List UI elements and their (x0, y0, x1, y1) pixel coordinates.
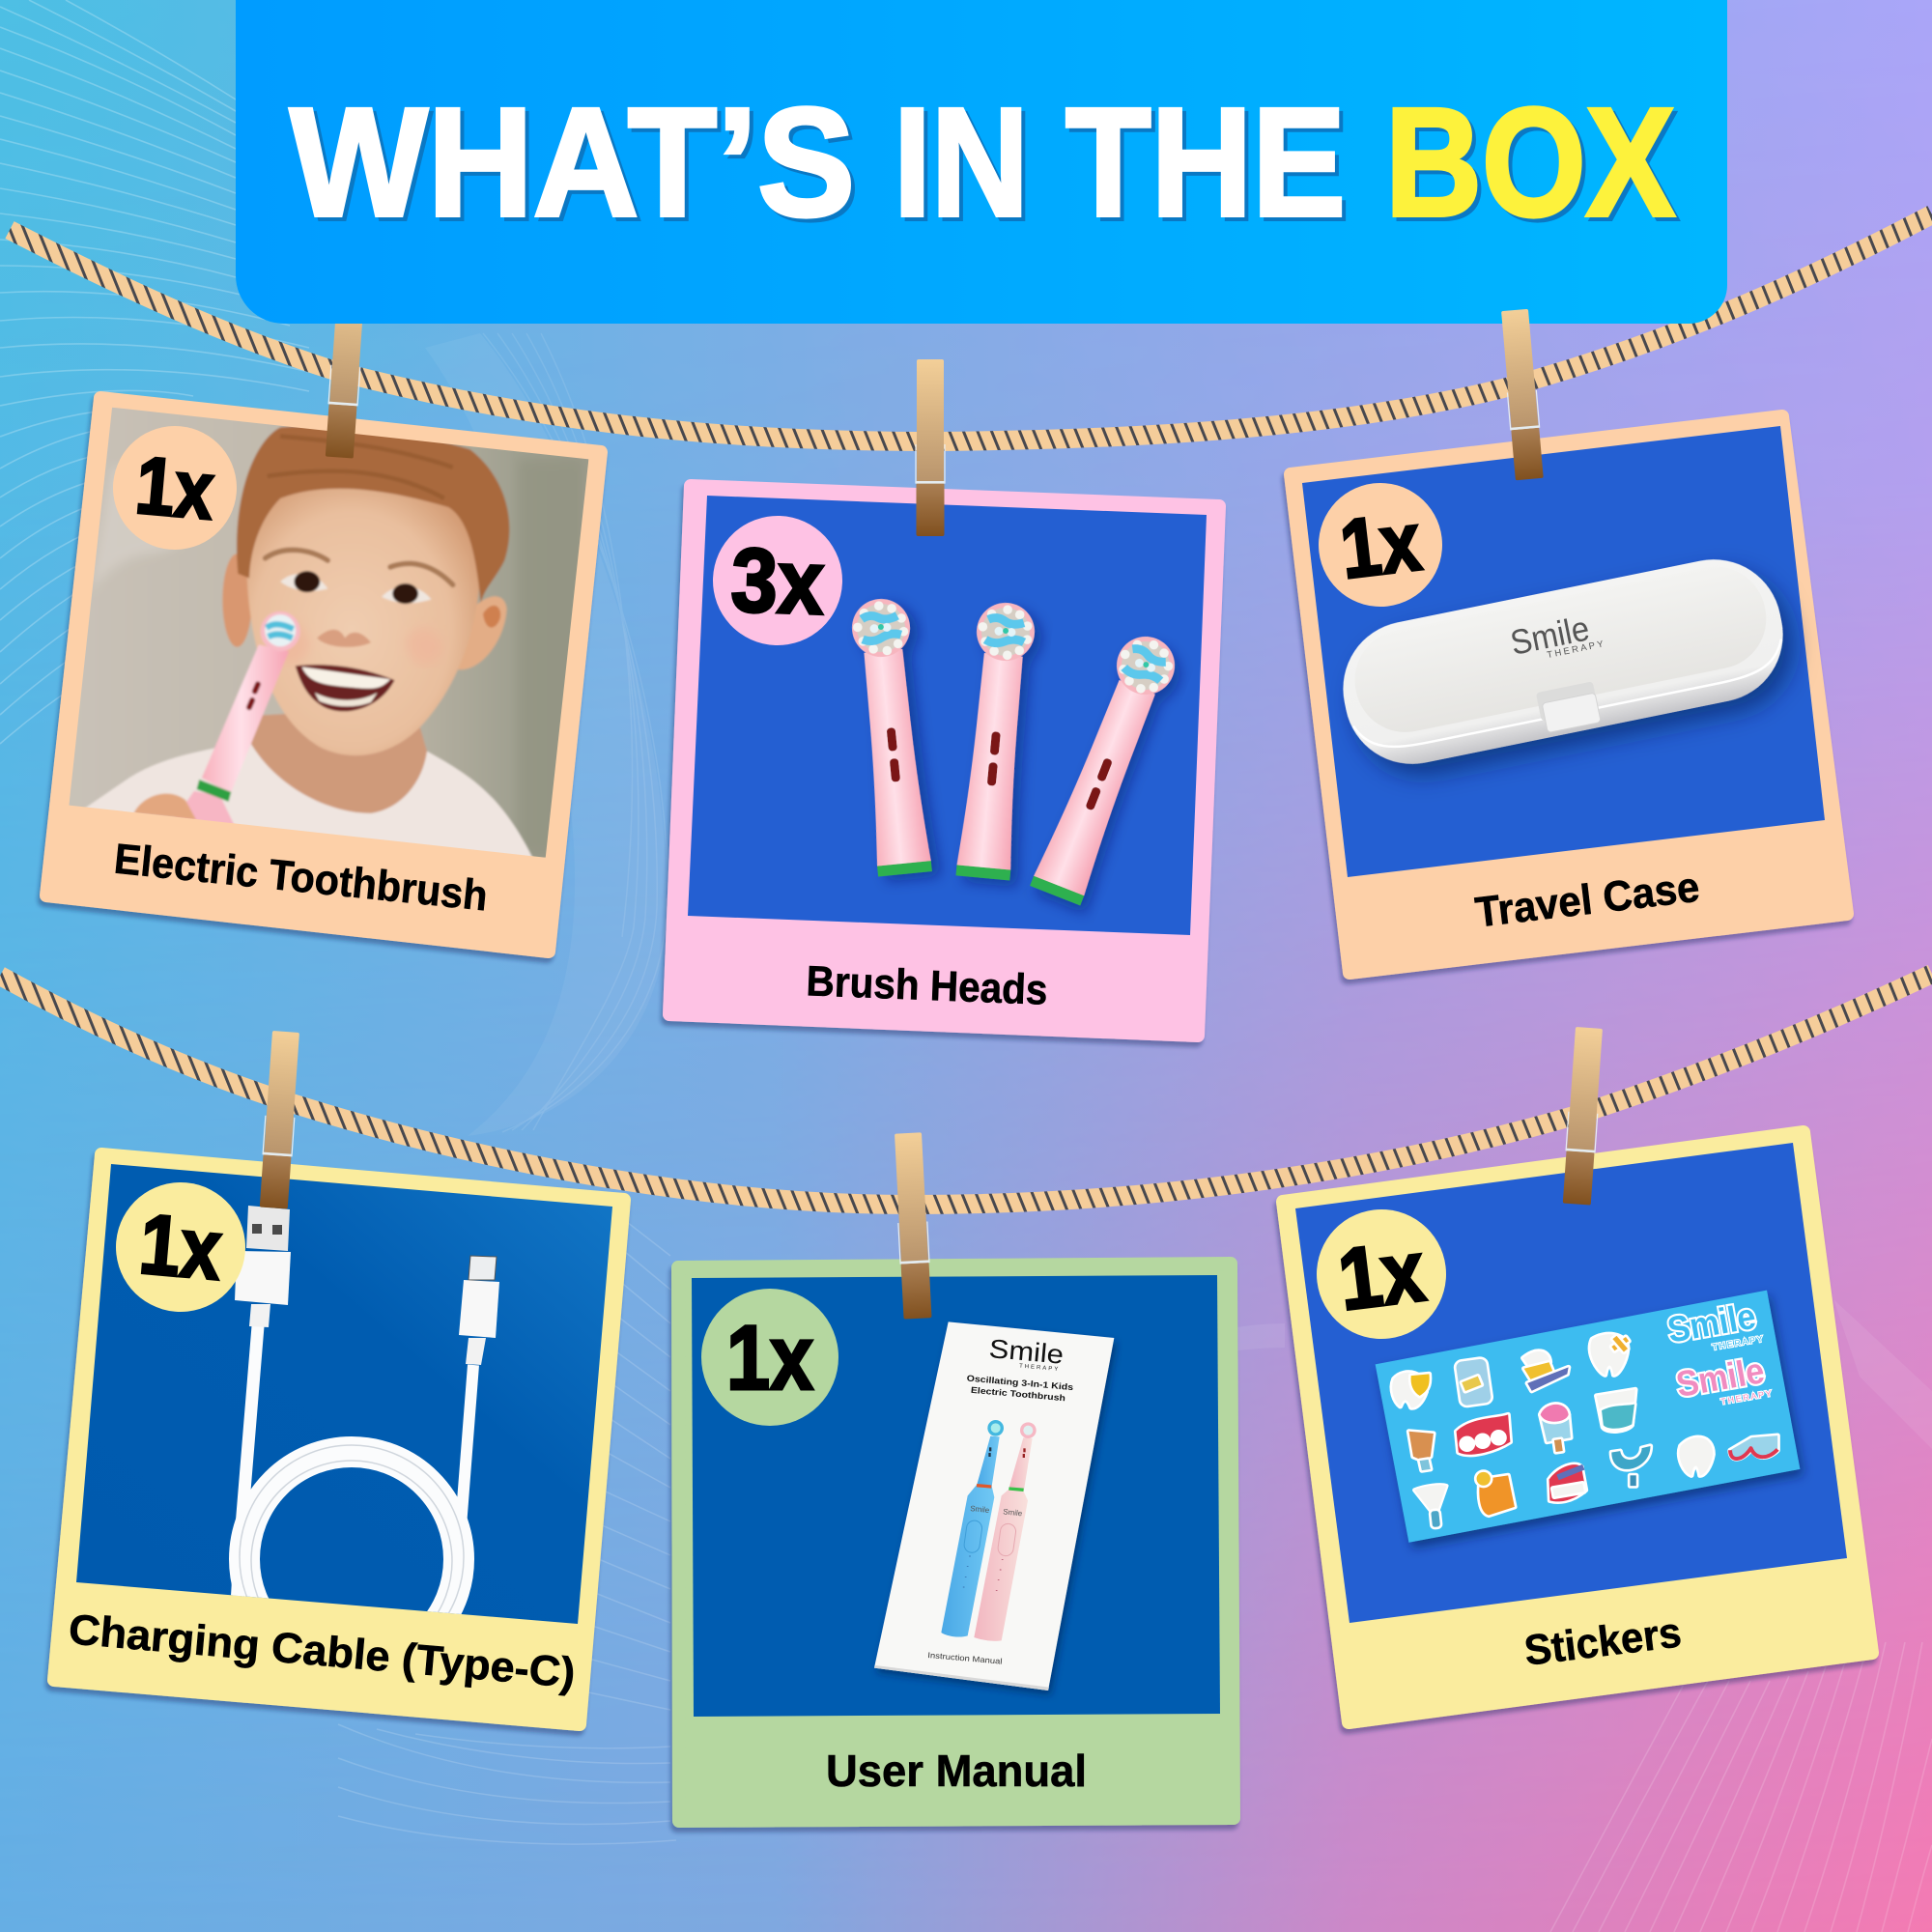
badge 1x: 1x (136, 1196, 225, 1297)
travel case: THERAPY (1546, 639, 1606, 661)
title: WHAT’S (294, 79, 859, 252)
badge 1x: 1x (1333, 1223, 1430, 1329)
clothes peg 3 (1500, 309, 1544, 480)
manual footer: Instruction Manual (927, 1650, 1003, 1666)
stickers icons row 1 (1392, 1334, 1629, 1407)
title: BOX (1389, 79, 1679, 252)
travel case (1331, 548, 1795, 776)
photo background (1295, 1143, 1847, 1623)
clothes peg 1 (325, 280, 366, 459)
label: Stickers (1521, 1608, 1684, 1675)
badge 1x (1312, 476, 1449, 613)
title: WHAT’S (290, 75, 855, 248)
manual logo: Smile (988, 1333, 1065, 1370)
label: Charging Cable (Type-C) (67, 1605, 577, 1697)
panel: travel case (1291, 416, 1847, 973)
badge 1x (108, 421, 242, 554)
sticker logo blue: THERAPY (1712, 1333, 1765, 1351)
label: Brush Heads (806, 957, 1048, 1014)
badge 3x: 3x (729, 528, 826, 634)
photo background (76, 1164, 612, 1624)
sticker sheet (1376, 1291, 1800, 1543)
photo: smiling boy with toothbrush (65, 405, 595, 862)
sticker logo pink: THERAPY (1720, 1388, 1774, 1406)
clothes peg 4 (259, 1031, 300, 1209)
badge 3x (711, 514, 844, 647)
card frame (46, 398, 601, 952)
cable (235, 1206, 499, 1669)
badge 1x: 1x (1336, 496, 1426, 596)
label: User Manual (826, 1746, 1087, 1796)
sticker logo blue: Smile (1664, 1296, 1759, 1350)
panel: stickers (1283, 1132, 1872, 1722)
title (290, 75, 1679, 252)
badge 1x (1309, 1202, 1454, 1347)
clothes peg 6 (1562, 1027, 1604, 1206)
card frame (1291, 416, 1847, 973)
card frame (669, 486, 1219, 1036)
label: Electric Toothbrush (112, 836, 490, 921)
panel: electric toothbrush (46, 398, 601, 952)
brush head 1 (849, 596, 934, 877)
badge 1x: 1x (132, 440, 217, 536)
blue toothbrush (941, 1420, 1004, 1637)
instruction manual booklet: THERAPY (1019, 1364, 1060, 1373)
pink toothbrush: Smile (1003, 1507, 1023, 1518)
instruction manual booklet (874, 1321, 1114, 1690)
photo background (688, 496, 1207, 935)
badge 1x (110, 1177, 251, 1318)
clothes peg 2 (916, 359, 945, 536)
instruction manual booklet: Electric Toothbrush (971, 1385, 1065, 1403)
title banner (236, 0, 1727, 324)
USB-A plug (235, 1206, 291, 1327)
title: THE (1065, 75, 1346, 248)
badge 1x: 1x (726, 1307, 813, 1409)
card frame (678, 1264, 1234, 1821)
label: Travel Case (1473, 864, 1702, 937)
stickers icons row 3 (1414, 1435, 1777, 1527)
badge 1x (701, 1289, 838, 1426)
title: IN (894, 75, 1029, 248)
panel: charging cable (54, 1154, 624, 1724)
blue toothbrush: Smile (970, 1504, 990, 1515)
sticker logo pink: Smile (1673, 1351, 1768, 1406)
top rope (10, 214, 1932, 441)
stickers icons row 2 (1408, 1389, 1635, 1470)
photo background (692, 1275, 1220, 1717)
title: BOX (1385, 75, 1675, 248)
photo background (1302, 426, 1825, 877)
USB-C plug (459, 1256, 499, 1365)
panel: user manual (678, 1264, 1234, 1821)
title: IN (897, 79, 1033, 252)
card frame (1283, 1132, 1872, 1722)
card frame (54, 1154, 624, 1724)
panel: brush heads (669, 486, 1219, 1036)
clothes peg 5 (894, 1132, 932, 1320)
brush head 3 (1028, 628, 1183, 906)
manual heading: Oscillating 3-In-1 Kids (966, 1374, 1073, 1392)
pink toothbrush (974, 1422, 1037, 1641)
case logo: Smile (1507, 608, 1593, 663)
brush head 2 (953, 600, 1037, 881)
bottom rope (0, 974, 1932, 1205)
title: THE (1069, 79, 1350, 252)
